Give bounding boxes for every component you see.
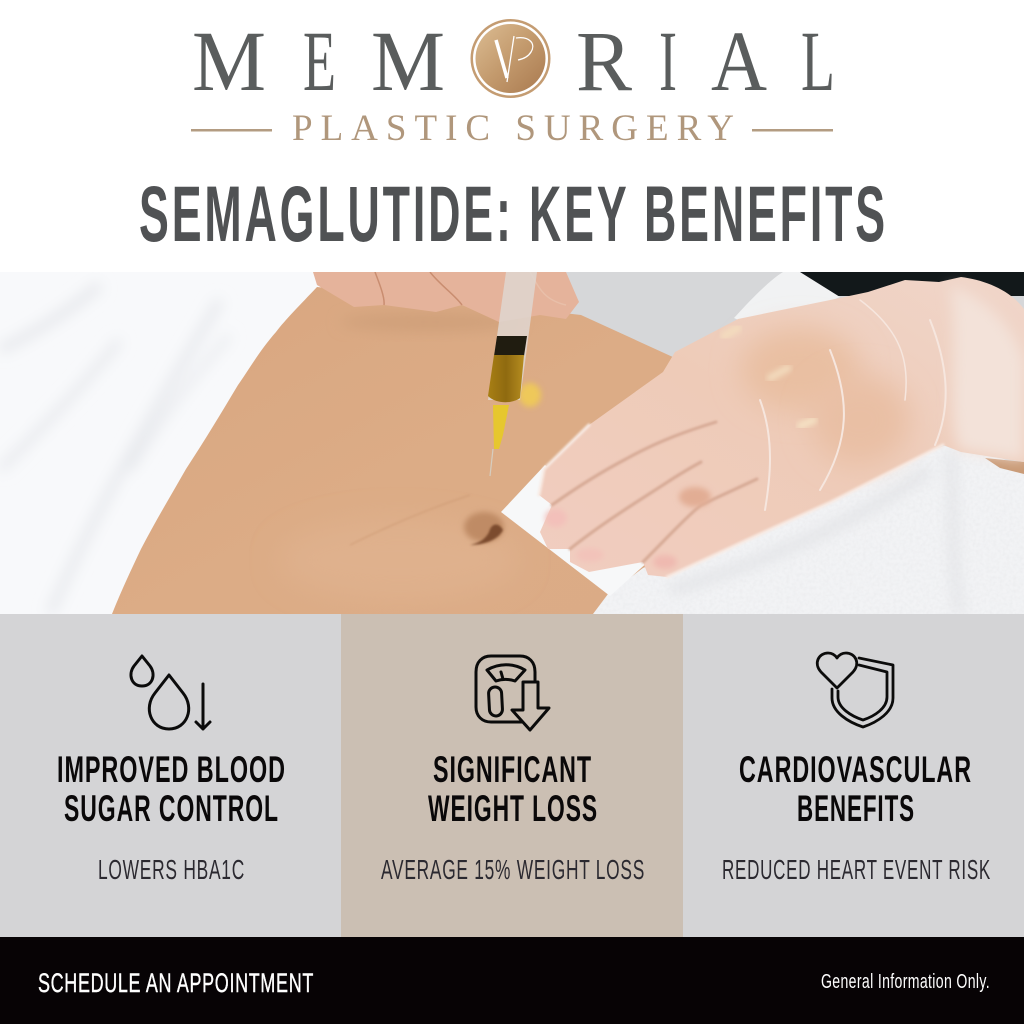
syringe needle bbox=[490, 449, 493, 476]
photo sheet folds bbox=[6, 288, 216, 605]
heading: improved blood sugar control: IMPROVED BLOOD bbox=[57, 749, 286, 790]
logo wordmark: MEMORIAL bbox=[192, 13, 835, 109]
panel background left bbox=[0, 614, 341, 937]
heading: significant weight loss bbox=[428, 749, 598, 829]
photo upper towel bbox=[734, 272, 840, 320]
photo gauze pad bbox=[501, 465, 650, 596]
logo wordmark: MEMORIAL: M bbox=[371, 13, 445, 109]
photo right towel bbox=[593, 440, 1024, 614]
subtext: average 15% weight loss: AVERAGE 15% WEIGHT LOSS bbox=[381, 854, 645, 885]
syringe glow on skin bbox=[519, 383, 541, 407]
logo emblem: gold oval monogram bbox=[470, 19, 550, 98]
photo holding hand at top bbox=[313, 272, 579, 322]
logo wordmark: MEMORIAL: I bbox=[659, 13, 677, 109]
photo: semaglutide injection into abdomen bbox=[0, 272, 1024, 614]
heading: cardiovascular benefits bbox=[739, 749, 972, 829]
photo dark background corner bbox=[790, 272, 1024, 296]
heading: cardiovascular benefits: BENEFITS bbox=[797, 788, 915, 829]
photo holding hand finger creases bbox=[375, 272, 566, 305]
photo navel bbox=[464, 512, 504, 545]
photo skin at wrist bbox=[985, 458, 1024, 474]
photo gloved hand bbox=[539, 277, 1024, 577]
photo towel texture bbox=[593, 440, 1024, 614]
heading: improved blood sugar control bbox=[57, 749, 286, 829]
photo syringe bbox=[488, 272, 541, 476]
call to action: SCHEDULE AN APPOINTMENT bbox=[38, 968, 314, 998]
logo: Memorial Plastic Surgery bbox=[191, 13, 835, 149]
logo wordmark: MEMORIAL: E bbox=[303, 13, 336, 109]
footer bar bbox=[0, 937, 1024, 1024]
panel background right bbox=[683, 614, 1024, 937]
photo skin shading bbox=[280, 312, 520, 600]
syringe liquid bbox=[488, 355, 524, 402]
photo white sheet bbox=[0, 272, 330, 614]
logo wordmark: MEMORIAL: L bbox=[801, 13, 835, 109]
logo wordmark: MEMORIAL: A bbox=[711, 13, 767, 109]
panel: cardiovascular benefits bbox=[683, 614, 1024, 937]
photo towel shading bbox=[682, 476, 921, 588]
photo glove highlights and creases bbox=[539, 285, 1024, 577]
icon: weighing scale with down arrow bbox=[476, 656, 549, 730]
footer background bbox=[0, 937, 1024, 1024]
logo wordmark: MEMORIAL: M bbox=[192, 13, 266, 109]
icon: blood drops with down arrow bbox=[131, 656, 210, 729]
logo rule left bbox=[191, 129, 272, 132]
heading: improved blood sugar control: SUGAR CONTROL bbox=[64, 788, 279, 829]
photo abdomen skin bbox=[112, 287, 700, 614]
syringe plunger bbox=[494, 336, 527, 356]
syringe hub bbox=[493, 405, 509, 449]
icon: heart with shield bbox=[817, 653, 893, 727]
logo rule right bbox=[752, 129, 833, 132]
panel: significant weight loss bbox=[341, 614, 683, 937]
panel: improved blood sugar control bbox=[0, 614, 341, 937]
panel background center bbox=[341, 614, 683, 937]
heading: significant weight loss: WEIGHT LOSS bbox=[428, 788, 598, 829]
heading: significant weight loss: SIGNIFICANT bbox=[433, 749, 592, 790]
logo wordmark: MEMORIAL: R bbox=[576, 13, 633, 109]
subtext: lowers hba1c: LOWERS HBA1C bbox=[98, 854, 245, 885]
syringe barrel bbox=[488, 272, 537, 400]
logo tagline: Plastic Surgery: PLASTIC SURGERY bbox=[292, 108, 734, 149]
photo backdrop wall bbox=[566, 272, 1024, 462]
